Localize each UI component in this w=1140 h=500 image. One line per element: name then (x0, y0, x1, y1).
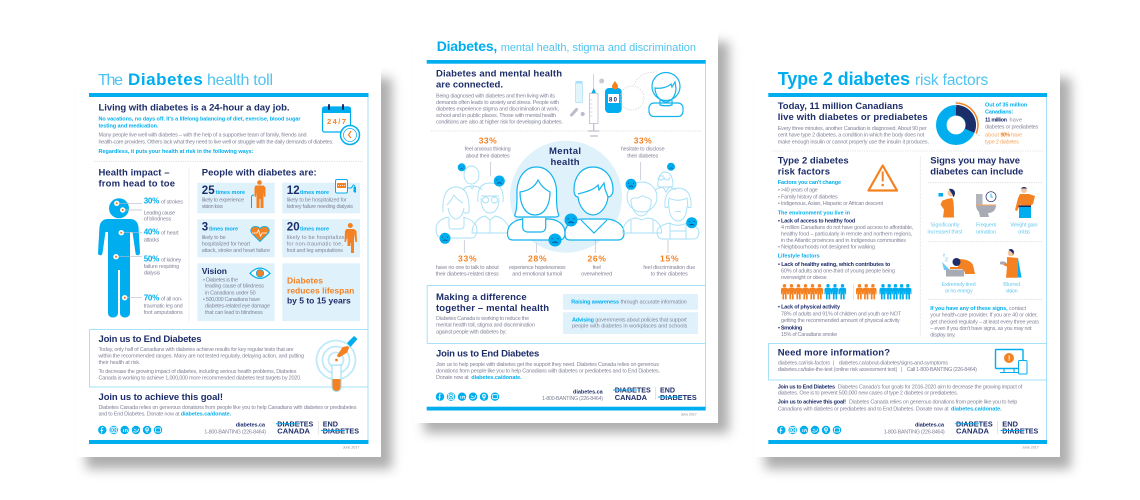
card: 12 times more (282, 180, 360, 213)
stats: four percentages: experience hopelessness (509, 265, 566, 271)
text block: risk factor lists: 78% of adults and 91% of children and youth are NOT (781, 311, 902, 317)
text block: join us: Join us to help people with diabetes get the support they need. Diabetes Canada relies on generous (436, 362, 659, 368)
text block: 24-hour job (98, 102, 334, 155)
labels: body statistics: of strokes (161, 199, 183, 205)
legend: donut: have (1010, 118, 1022, 124)
text block: 11 million (778, 101, 929, 145)
pictogram: people ratios (781, 284, 911, 300)
contact: website and phone (542, 389, 604, 402)
card: 25 times more: vision loss (202, 204, 223, 210)
icon: test tube and dropper (316, 336, 358, 392)
date: June 2017 (343, 446, 359, 450)
sign: urination (976, 192, 996, 235)
date: June 2017 (1022, 446, 1039, 450)
logo: diabetes canada and end diabetes (613, 386, 697, 402)
text block: connected: are connected. (436, 80, 503, 91)
panel: advising: governments about policies that support (595, 317, 687, 323)
stats: four percentages: overwhelmed (581, 271, 612, 277)
sign: tired (942, 254, 976, 295)
text block: 24-hour job: No vacations, no days off. It's a lifelong balancing of diet, exercise, blood sugar (98, 116, 301, 122)
logo: diabetes canada and end diabetes: CANADA (956, 426, 990, 435)
stats: four percentages: 15% (660, 254, 679, 264)
illustration: left people (436, 163, 510, 244)
stats: four percentages: 26% (587, 254, 606, 264)
stats: four percentages (436, 254, 695, 277)
card: reduces lifespan (282, 263, 360, 321)
logo: diabetes canada and end diabetes: CANADA (615, 393, 648, 402)
card: 20 times more (282, 219, 360, 257)
sign: weight: Weight gain (1010, 223, 1038, 229)
stats: four percentages: 33% (458, 254, 477, 264)
sign: tired: Extremely tired (942, 282, 976, 288)
text block: risk factor lists: in the Atlantic provinces and in Indigenous communities (781, 238, 906, 244)
card: 3 times more: attack, stroke and heart failure (202, 248, 270, 254)
labels: body statistics: 30% (144, 196, 159, 205)
panel: raising awareness: Raising awareness (571, 299, 619, 305)
card: vision: Vision (202, 266, 227, 276)
contact: website and phone: 1-800-BANTING (226-8464) (204, 429, 266, 435)
text block: connected: demands often leads to anxiety and stress. People with (436, 100, 559, 106)
card: vision (197, 263, 275, 321)
contact: website and phone: diabetes.ca (573, 389, 604, 395)
heading: signs: Signs you may have (930, 155, 1020, 166)
text block: need more information: diabetes.ca/risk-factors (778, 360, 830, 366)
contact: website and phone: diabetes.ca (236, 423, 266, 429)
legend: donut: type 2 diabetes (985, 140, 1019, 146)
legend: donut: 90% (1000, 133, 1010, 139)
text block: risk factor lists: Lifestyle factors (778, 254, 820, 260)
callout: 33% disclose: their diabetes (627, 153, 658, 159)
icon: person amputation (344, 223, 357, 253)
stats: four percentages: have no one to talk to about (436, 265, 499, 271)
heading: health impact (98, 168, 175, 190)
diagram: body figure with markers (98, 198, 142, 318)
text block: 24-hour job: Many people live well with diabetes – with the help of a supportive team of family, friends and (98, 133, 306, 139)
panel: risk factors sheet (755, 64, 1060, 457)
labels: body statistics: of blindness (144, 217, 171, 223)
text block: join us: Canadians with diabetes or prediabetes and to End Diabetes. Donate now at (778, 406, 949, 412)
stats: four percentages: feel discrimination due (643, 265, 695, 271)
text block: risk factor lists: • Indigenous, Asian, Hispanic or African descent (778, 201, 883, 207)
logo: diabetes canada and end diabetes: END (323, 420, 339, 429)
legend: donut: Out of 35 million (985, 103, 1028, 109)
heading: health impact: Health impact – (98, 168, 170, 179)
title: mental health: Diabetes, (437, 38, 497, 54)
title: risk factors: risk factors (915, 72, 989, 89)
contact: website and phone (884, 423, 945, 435)
text block: making a difference: against people with diabetes by: (436, 329, 507, 335)
icons: sad faces centre (548, 214, 578, 246)
card: 12 times more: 12 (287, 185, 300, 197)
text block: if you have signs: contact (1009, 306, 1026, 312)
panel: advising: Advising (572, 317, 594, 323)
card: 25 times more: times more (216, 190, 245, 196)
callout: 33% anxious: feel anxious thinking (465, 147, 511, 153)
panel: health toll sheet (76, 64, 381, 457)
card: 20 times more: for non-traumatic toe, (287, 242, 343, 248)
legend: donut: diabetes or prediabetes (985, 125, 1039, 131)
card: 3 times more: likely to be (202, 235, 226, 241)
logo: diabetes canada and end diabetes (276, 420, 359, 435)
panel: raising awareness: through accurate information (620, 299, 687, 305)
illustration: right people (623, 163, 699, 239)
card: 25 times more (197, 180, 275, 213)
callout: 33% disclose (621, 135, 665, 159)
text block: connected: Being diagnosed with diabetes and then living with its (436, 93, 555, 99)
text block: risk factor lists (778, 180, 914, 338)
text block: join us: Join us to achieve this goal! (778, 400, 846, 406)
text block: join us to end diabetes: Today, only half of Canadians with diabetes achieve results for key regular tests that are (98, 347, 294, 353)
text block: join us: Donate now at (436, 375, 469, 381)
text block: if you have signs: get checked regularly – at least every three years (930, 319, 1039, 325)
text block: if you have signs: display any. (930, 333, 956, 339)
date: June 2017 (681, 412, 697, 416)
text block: join us: diabetes. One is to prevent 500,000 new cases of type 2 diabetes or prediabetes. (778, 391, 958, 397)
contact: website and phone: 1-800-BANTING (226-8464) (884, 429, 945, 435)
text block: need more information: diabetes.ca/take-the-test (online risk assessment test) (778, 367, 897, 373)
text block: connected: conditions are also at higher risk for developing diabetes. (436, 120, 563, 126)
card: 20 times more: times more (300, 227, 329, 233)
text block: join us to end diabetes: Join us to End Diabetes (98, 334, 202, 345)
logo: diabetes canada and end diabetes: CANADA (277, 426, 311, 435)
text block: join us to end diabetes (98, 334, 304, 382)
chart: donut (941, 101, 980, 140)
text block: join us to end diabetes: Canada is working to achieve 1,000,000 more recommended diabetes test targets by 2020. (98, 376, 302, 382)
callout: 33% anxious: about their diabetes (466, 153, 510, 159)
icon: monitor and phone: ! (1008, 356, 1010, 362)
text block: if you have signs: If you have any of these signs, (930, 306, 1008, 312)
legend: donut: have (1011, 133, 1022, 139)
sign: blurred vision: Blurred (1003, 282, 1020, 288)
legend: donut: 11 million (985, 118, 1008, 124)
text block: 24-hour job: testing and medication. (98, 124, 159, 130)
panel: mental health sheet (414, 28, 718, 423)
sign: thirst: Significantly (930, 223, 960, 229)
labels: body statistics: of kidney (161, 257, 182, 263)
legend: donut: Canadians: (985, 109, 1013, 115)
icons: social media (777, 426, 841, 434)
title: risk factors: Type 2 diabetes (778, 69, 910, 89)
card: vision: • 500,000 Canadians have (203, 297, 260, 303)
icon: warning triangle (868, 166, 897, 190)
text block: if you have signs: – even if you don't have signs, as you may not (930, 326, 1032, 332)
card: vision: leading cause of blindness (205, 284, 264, 290)
labels: body statistics: failure requiring (144, 264, 179, 270)
logo: diabetes canada and end diabetes: DIABETES (615, 386, 651, 395)
text block: risk factor lists: • Lack of access to healthy food (778, 218, 855, 224)
sign: tired: or no energy (945, 289, 973, 295)
card: 12 times more: kidney failure needing dialysis (287, 204, 353, 210)
icon: glucose meter: 80 (609, 98, 618, 104)
title: health toll: The (98, 72, 123, 89)
contact: website and phone: diabetes.ca (915, 423, 945, 429)
stats: four percentages: feel (593, 265, 601, 271)
icon: person portrait (649, 72, 683, 116)
text block: need more information: | (901, 367, 902, 373)
text block: join us: Diabetes Canada relies on generous donations from people like you to help (849, 400, 1017, 406)
text block: join us: Diabetes Canada's four goals for 2016-2020 aim to decrease the growing impact of (838, 384, 1023, 390)
card: 25 times more: 25 (202, 185, 215, 197)
text block: achieve this goal: Diabetes Canada relies on generous donations from people like you to help Canadians with diabetes or prediabetes (98, 405, 357, 411)
logo: diabetes canada and end diabetes: DIABETES (1002, 426, 1038, 435)
text block: risk factor lists: • Family history of diabetes (778, 194, 838, 200)
heading: risk factors: Type 2 diabetes (778, 155, 849, 166)
card: 20 times more: foot and leg amputations (287, 248, 343, 254)
labels: body statistics (144, 196, 183, 316)
text block: risk factor lists: • Neighbourhoods not designed for walking (778, 245, 875, 251)
text block: risk factor lists: • >40 years of age (778, 188, 818, 194)
title: health toll: Diabetes (128, 70, 203, 89)
text block: join us: Join us to End Diabetes (778, 384, 835, 390)
legend: donut: about (985, 133, 999, 139)
callout: 33% disclose: hesitate to disclose (621, 147, 665, 153)
text block: join us: diabetes.ca/donate. (951, 406, 1002, 412)
text block: join us to end diabetes: their health at risk. (98, 360, 141, 366)
logo: diabetes canada and end diabetes: END (1002, 420, 1019, 429)
text block: achieve this goal: Join us to achieve this goal! (98, 392, 223, 403)
text block: risk factor lists: healthy food – particularly in remote and northern regions, (781, 232, 913, 238)
illustration: centre woman and man (508, 167, 624, 246)
sign: urination: Frequent (976, 223, 996, 229)
text block: need more information: diabetes.ca/about-diabetes/signs-and-symptoms (839, 360, 948, 366)
icon: eye (250, 268, 270, 278)
icon: calendar and clock: 24/7 (327, 117, 346, 126)
card: 20 times more: likely to be hospitalized (287, 235, 348, 241)
text block: risk factor lists: Factors you can't change (778, 180, 841, 186)
icon: dialysis bag (336, 180, 356, 193)
title: mental health (437, 38, 696, 54)
card: vision: diabetes-related eye damage (205, 304, 270, 310)
logo: diabetes canada and end diabetes: END (660, 386, 676, 395)
text block: 24-hour job: Living with diabetes is a 24-hour a day job. (98, 102, 290, 114)
icon: vial, syringe, pills (572, 74, 604, 136)
labels: body statistics: dialysis (144, 271, 160, 277)
panel: raising awareness (563, 294, 698, 310)
heading: signs: diabetes can include (930, 166, 1023, 177)
sign: blurred vision: vision (1006, 289, 1018, 295)
circle background: mental health: health (550, 157, 580, 168)
sign: weight: or loss (1018, 229, 1030, 235)
card: reduces lifespan: reduces lifespan (287, 286, 354, 296)
text block: join us (778, 384, 1023, 412)
labels: body statistics: of heart (161, 230, 179, 236)
icons: social media (98, 426, 162, 434)
icons: social media (436, 392, 499, 401)
text block: if you have signs: your health-care provider. If you are 40 or older, (930, 313, 1038, 319)
labels: body statistics: attacks (144, 237, 159, 243)
stats: four percentages: to their diabetes (651, 271, 688, 277)
card: 3 times more (197, 219, 275, 257)
icon: heart with pulse (251, 226, 269, 242)
card: 3 times more: times more (209, 227, 238, 233)
icons: sad faces left (440, 163, 505, 244)
text block: risk factor lists: getting the recommended amount of physical activity (781, 318, 900, 324)
panel: advising: people with diabetes in workplaces and schools (572, 323, 688, 329)
logo: diabetes canada and end diabetes: DIABETES (956, 420, 993, 429)
heading: risk factors (778, 155, 849, 177)
text block: achieve this goal: diabetes.ca/donate. (181, 411, 232, 417)
logo: diabetes canada and end diabetes: DIABETES (277, 420, 313, 429)
text block: risk factor lists: 15% of Canadians smoke (781, 332, 837, 338)
text block: 24-hour job: health-care providers. Others lack what they need to live well or struggle with the daily demands of diabetes. (98, 140, 334, 146)
icon: dashed cycle (620, 72, 657, 110)
contact: website and phone: 1-800-BANTING (226-8464) (542, 396, 603, 402)
card: 3 times more: 3 (202, 222, 208, 234)
text block: 11 million: make enough insulin or cannot properly use the insulin it produces. (778, 139, 929, 145)
card: 25 times more: likely to experience (202, 198, 244, 204)
text block: risk factor lists: overweight or obese (781, 275, 827, 281)
text block: need more information (778, 348, 977, 373)
heading: people with diabetes: People with diabetes are: (202, 168, 317, 179)
card: 12 times more: likely to be hospitalized for (287, 198, 347, 204)
contact: website and phone (204, 423, 266, 435)
text block: need more information: Need more information? (778, 348, 890, 359)
circle background: mental health: Mental (549, 146, 581, 157)
title: mental health: mental health, stigma and discrimination (501, 42, 696, 54)
text block: achieve this goal: and to End Diabetes. Donate now at (98, 411, 180, 417)
text block: making a difference (436, 292, 549, 335)
text block: join us (436, 349, 660, 381)
text block: connected: school and in public places. Those with mental health (436, 113, 556, 119)
logo: diabetes canada and end diabetes (955, 420, 1038, 435)
labels: body statistics: 40% (144, 227, 159, 236)
text block: join us: donations from people like you to help Canadians with diabetes or prediabetes and to End Diabetes. (436, 368, 660, 374)
circle background: mental health (510, 141, 622, 253)
shadow: sheets (86, 42, 1071, 469)
text block: connected (436, 69, 563, 126)
text block: making a difference: Diabetes Canada is working to reduce the (436, 316, 529, 322)
logo: diabetes canada and end diabetes: DIABETES (323, 426, 359, 435)
text block: risk factor lists: 60% of adults and one-third of young people being (781, 268, 895, 274)
stats: four percentages: and emotional turmoil (512, 271, 562, 277)
text block: risk factor lists: • Lack of physical activity (778, 305, 841, 311)
title: health toll (98, 70, 273, 89)
text block: join us: diabetes.ca/donate. (471, 375, 522, 381)
text block: risk factor lists: • Smoking (778, 326, 802, 332)
text block: achieve this goal (98, 392, 357, 417)
labels: body statistics: foot amputations (144, 310, 183, 316)
text block: 11 million: cent have type 2 diabetes, a condition in which the body does not (778, 133, 925, 139)
labels: body statistics: traumatic leg and (144, 303, 183, 309)
sign: blurred vision (1000, 249, 1022, 295)
icon: glucose meter (605, 81, 622, 113)
labels: body statistics: of all non- (161, 297, 183, 303)
card: vision: • Diabetes is the (203, 277, 238, 283)
callout: 33% anxious: 33% (479, 135, 497, 145)
heading: health impact: from head to toe (98, 179, 175, 190)
text block: join us: Join us to End Diabetes (436, 349, 539, 360)
labels: body statistics: 50% (144, 254, 159, 263)
icons: sad faces right (626, 163, 697, 228)
text block: join us to end diabetes: To decrease the growing impact of diabetes, including serious health problems, Diabetes (98, 369, 297, 375)
callout: 33% anxious (465, 135, 511, 159)
card: reduces lifespan: by 5 to 15 years (287, 296, 351, 306)
text block: risk factor lists: 4 million Canadians do not have good access to affordable, (781, 225, 914, 231)
heading: signs (930, 155, 1023, 177)
logo: diabetes canada and end diabetes: DIABETES (660, 393, 697, 402)
icon: person with cane (252, 180, 266, 208)
text block: 24-hour job: Regardless, it puts your health at risk in the following ways: (98, 149, 254, 155)
labels: body statistics: 70% (144, 294, 159, 303)
labels: body statistics: Leading cause (144, 210, 175, 216)
card: 3 times more: hospitalized for heart (202, 242, 250, 248)
text block: connected: Diabetes and mental health (436, 69, 562, 80)
stats: four percentages: their diabetes-related stress (436, 271, 499, 277)
sign: weight (1010, 187, 1038, 235)
card: reduces lifespan: Diabetes (287, 275, 323, 285)
legend: donut (985, 103, 1039, 146)
icon: calendar and clock (322, 104, 360, 144)
text block: if you have signs (930, 306, 1039, 339)
text block: making a difference: Making a difference (436, 292, 527, 303)
callout: 33% disclose: 33% (634, 135, 652, 145)
text block: 11 million: live with diabetes or prediabetes (778, 112, 928, 123)
card: 12 times more: times more (300, 190, 329, 196)
text block: need more information: | (833, 360, 834, 366)
text block: 11 million: Every three minutes, another Canadian is diagnosed. About 90 per (778, 126, 927, 132)
text block: connected: diabetes experience stigma and discrimination at work, (436, 106, 559, 112)
panel: advising (563, 312, 698, 334)
sign: thirst: increased thirst (928, 229, 963, 235)
card: vision: in Canadians under 50 (205, 290, 256, 296)
heading: risk factors: risk factors (778, 166, 830, 177)
text block: join us to end diabetes: within the recommended ranges. Many are not tested regularly, delaying action, and putting (98, 354, 304, 360)
sign: urination: urination (976, 229, 996, 235)
text block: making a difference: together – mental health (436, 303, 549, 314)
sign: thirst (928, 189, 963, 235)
text block: making a difference: mental health toll, stigma and discrimination (436, 323, 535, 329)
text block: risk factor lists: • Lack of healthy eating, which contributes to (778, 262, 891, 268)
card: 20 times more: 20 (287, 222, 300, 234)
stats: four percentages: 28% (528, 254, 547, 264)
title: health toll: health toll (207, 72, 273, 89)
card: vision: that can lead to blindness (205, 310, 263, 316)
title: risk factors (778, 69, 989, 89)
text block: risk factor lists: The environment you live in (778, 210, 851, 216)
text block: 11 million: Today, 11 million Canadians (778, 101, 903, 112)
text block: need more information: Call 1-800-BANTING (226-8464) (907, 367, 977, 373)
icon: monitor and phone (996, 350, 1027, 374)
